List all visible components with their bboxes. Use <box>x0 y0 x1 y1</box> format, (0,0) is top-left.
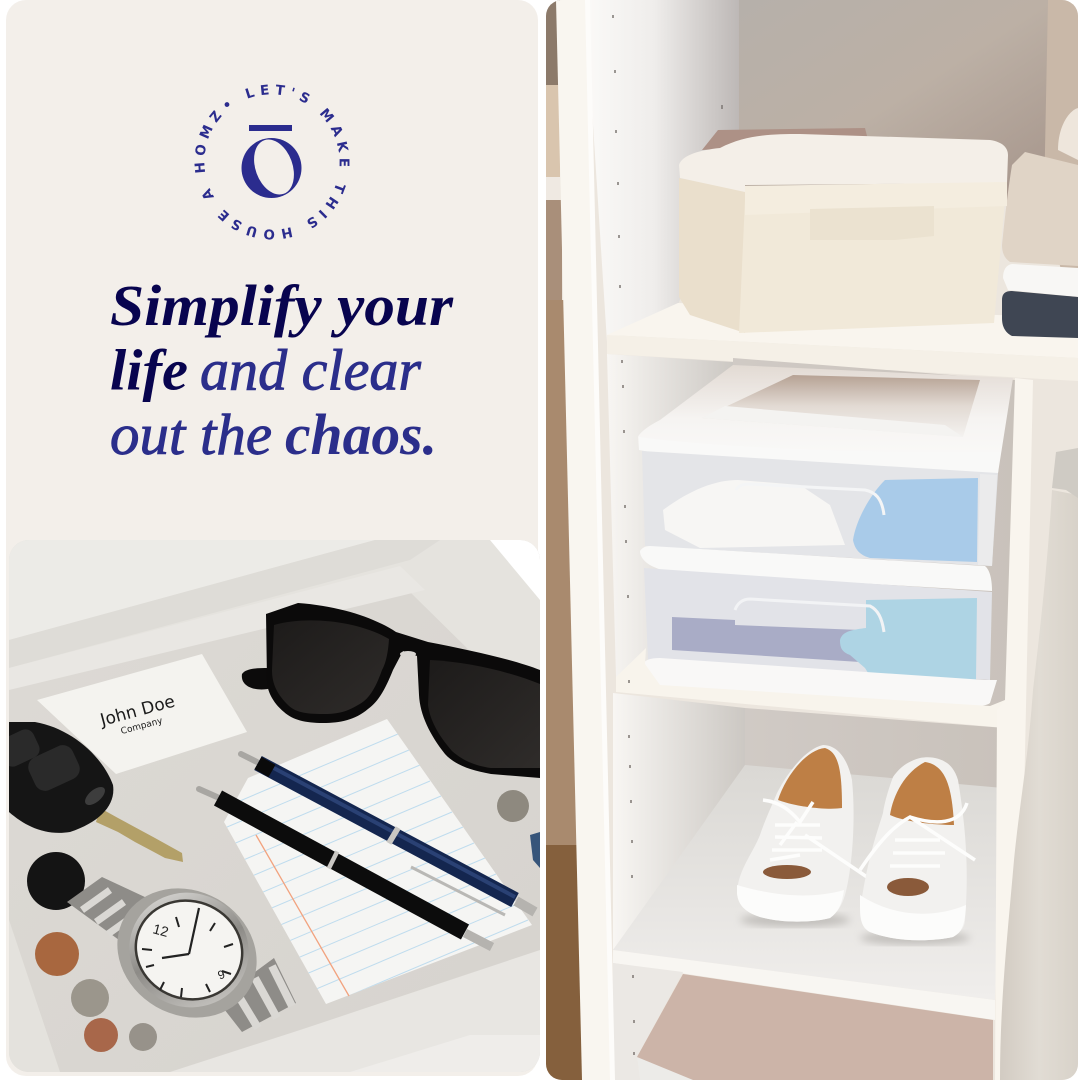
wristwatch <box>27 852 296 1043</box>
wristwatch: 6 <box>215 967 227 982</box>
top shelf <box>607 303 1078 381</box>
business card: John Doe <box>97 692 177 731</box>
pink towel under bottom shelf <box>612 963 993 1080</box>
wristwatch: 12 <box>151 920 171 940</box>
business card: Company <box>120 716 164 737</box>
logo badge: • LET'S MAKE THIS HOUSE A HOMZ <box>194 84 350 240</box>
blue pen <box>241 754 535 915</box>
left shoe <box>737 745 867 922</box>
folded towels on the right <box>1002 108 1078 338</box>
plastic three-sided drawer unit <box>638 365 1013 706</box>
wood background strip <box>546 0 585 1080</box>
hanging sweater <box>1000 448 1078 1080</box>
heading: Simplify your <box>110 273 453 338</box>
upper back wall <box>739 0 1051 200</box>
right shoe <box>860 757 975 940</box>
panel: headline and logo <box>6 0 538 1076</box>
middle shelf <box>616 648 1005 728</box>
business card <box>37 654 247 774</box>
panel: closet shelving photo <box>546 0 1078 1080</box>
upper side panel <box>585 0 739 342</box>
lower compartment walls <box>613 693 1005 950</box>
canvas storage basket <box>679 128 1008 333</box>
panel: tidy drawer photo <box>0 540 540 1072</box>
cabinet left frame <box>556 0 613 1080</box>
lid <box>638 365 1013 473</box>
loose coins <box>35 790 540 1052</box>
pair of white sneakers <box>737 745 975 945</box>
middle compartment <box>607 354 1015 706</box>
lower drawer <box>644 568 992 680</box>
sunglasses <box>242 603 540 778</box>
heading: chaos. <box>285 402 437 467</box>
car key <box>0 722 183 862</box>
vertical divider <box>995 378 1033 1080</box>
upper drawer <box>642 451 998 566</box>
bottom shelf <box>613 765 1003 1020</box>
upper right column <box>1045 0 1078 297</box>
heading: and clear <box>200 338 421 402</box>
drawer lip <box>640 546 992 591</box>
heading: life <box>110 338 188 402</box>
drawer base <box>643 658 997 706</box>
heading: out the <box>110 402 272 467</box>
shelf pin holes <box>613 15 722 1055</box>
notepad <box>224 719 532 1004</box>
black pen <box>199 789 492 947</box>
drawer rim <box>9 540 540 1072</box>
